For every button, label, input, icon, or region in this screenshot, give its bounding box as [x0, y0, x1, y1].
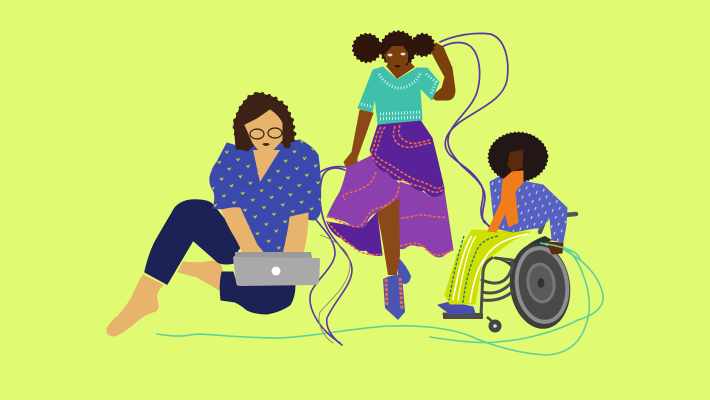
thread across wheel: [540, 243, 580, 260]
woman one: lower leg and foot: [107, 275, 163, 336]
woman two: face: [384, 46, 408, 72]
woman two: front boot: [383, 275, 405, 320]
caster wheel: [487, 317, 502, 332]
wheelchair seat fender: [492, 236, 552, 270]
shoes: [438, 302, 475, 314]
woman one: hair: [234, 93, 295, 150]
woman one: forearms and hands: [222, 208, 308, 258]
woman two: left arm: [344, 110, 373, 175]
woman two: hair: [353, 32, 434, 66]
woman in wheelchair: [438, 132, 580, 333]
leg: [377, 185, 400, 275]
hair: [488, 132, 548, 182]
artwork: [107, 32, 603, 355]
wheelchair back frame: [540, 214, 576, 232]
skirt: orange stitching: [327, 125, 452, 255]
woman in purple skirt: [327, 32, 455, 320]
rear wheel: [504, 239, 576, 333]
woman one: trousers seated leg: [220, 272, 295, 314]
skirt: left panel: [327, 155, 400, 227]
scarf: [488, 171, 523, 232]
woman two: neck: [386, 60, 415, 79]
face: [508, 150, 523, 172]
woman one: rear foot: [178, 261, 223, 290]
trouser stripes: [449, 234, 528, 303]
woman one: neck and chest: [253, 150, 280, 182]
woman two: raised arm: [430, 43, 455, 100]
wheelchair frame: [444, 258, 512, 316]
woman one: trousers upper leg: [145, 200, 243, 284]
blouse: [490, 175, 567, 242]
footrest: [443, 313, 483, 319]
woman two: back boot: [398, 257, 411, 284]
laptop: [233, 252, 320, 286]
top: embroidery: [361, 72, 436, 119]
threads behind figures: [157, 33, 603, 355]
skirt: lower dark panel: [327, 213, 382, 255]
hand: [547, 242, 563, 254]
skirt: right panel: [398, 182, 453, 257]
woman one: glasses: [250, 128, 282, 139]
trousers: [445, 230, 530, 304]
woman one: face: [245, 110, 282, 155]
woman one: lips: [262, 143, 270, 146]
skirt: upper dark panel: [370, 120, 444, 196]
woman two: top: [358, 67, 439, 124]
woman one: blouse: [210, 140, 321, 254]
woman two: eyes and mouth: [388, 53, 405, 68]
woman with laptop: [107, 93, 321, 336]
